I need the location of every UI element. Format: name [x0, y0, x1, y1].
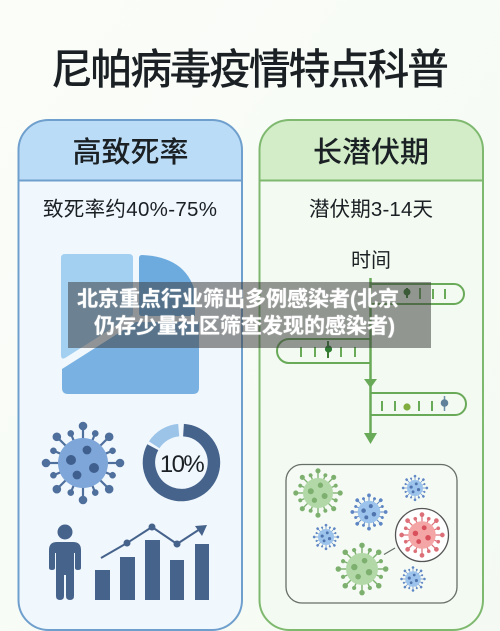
- panel header: high fatality rate: [18, 120, 242, 181]
- news caption overlay: [68, 282, 431, 348]
- panel header: long incubation period: [259, 120, 483, 181]
- panel outline: long incubation period: [260, 120, 483, 630]
- timeline bar 2: [277, 339, 370, 363]
- text: incubation range: 潜伏期3-14天: [309, 198, 433, 221]
- text: time axis label: 时间: [351, 249, 391, 272]
- virus: blue medium: [351, 494, 387, 530]
- timeline bar 1: [371, 284, 464, 304]
- panel outline: high fatality rate: [18, 120, 242, 630]
- donut chart: 10%: [149, 430, 214, 495]
- timeline: [277, 278, 466, 444]
- text: fatality rate range: 致死率约40%-75%: [43, 198, 217, 221]
- callout: red virus in circle: [396, 508, 448, 562]
- pie chart: [61, 254, 199, 394]
- donut label: 10%: [160, 451, 204, 478]
- trend line with arrow: [101, 524, 207, 558]
- virus: green upper: [294, 469, 342, 517]
- timeline bar 3: [371, 393, 466, 415]
- virus: blue small bottom: [400, 566, 426, 592]
- virus: green large: [336, 543, 388, 595]
- title: 尼帕病毒疫情特点科普: [51, 46, 449, 93]
- icon: virus: [42, 422, 124, 504]
- icon: person: [49, 524, 81, 600]
- heading: high fatality rate: 高致死率: [72, 136, 189, 169]
- heading: long incubation period: 长潜伏期: [313, 136, 429, 169]
- virus: blue small top: [402, 475, 428, 501]
- panel: high fatality rate: [18, 120, 242, 630]
- panel: long incubation period: [259, 120, 483, 630]
- caption line 1: 北京重点行业筛出多例感染者(北京: [77, 288, 399, 311]
- connector line: [384, 548, 395, 554]
- arrow head 2: [364, 433, 377, 444]
- virus: blue small left: [313, 524, 339, 550]
- screening box: [286, 464, 457, 603]
- bar chart: [95, 540, 209, 600]
- caption line 2: 仍存少量社区筛查发现的感染者): [94, 315, 395, 338]
- arrow head 1: [364, 379, 377, 388]
